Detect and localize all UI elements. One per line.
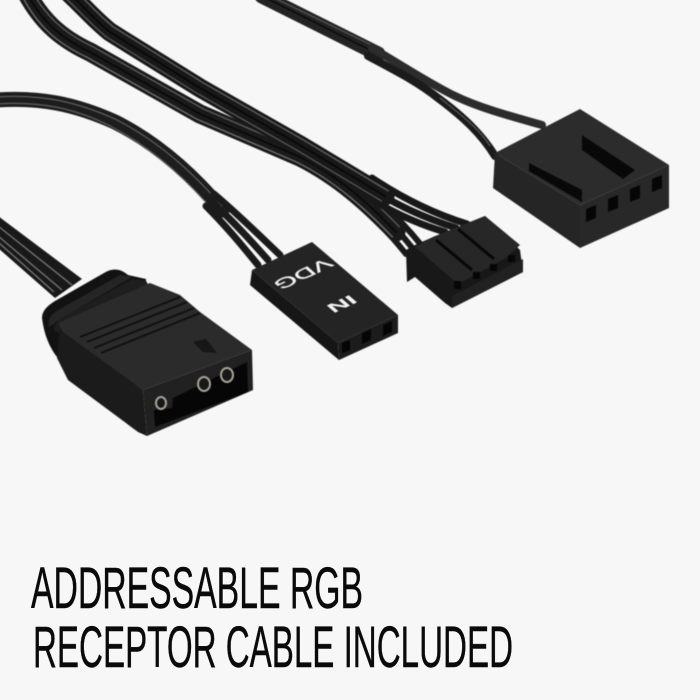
collar rings (42, 269, 146, 357)
front recess (154, 362, 248, 427)
sockets (454, 281, 461, 289)
top face (415, 216, 520, 284)
cable: left arc to VDG connector (0, 96, 280, 265)
front lip (452, 259, 523, 308)
cable: upper long bundle to small fan connector (66, 0, 467, 232)
cable: bundle to RGB connector (0, 216, 82, 298)
connector: small 4-pin fan (406, 216, 523, 308)
side face (250, 270, 339, 360)
top slots (582, 135, 635, 179)
connector: large 4-pin fan (493, 109, 669, 248)
ridges (80, 297, 200, 353)
connector: RGB receptor (42, 269, 253, 436)
title line 1: ADDRESSABLE RGB (31, 556, 363, 621)
top face (252, 242, 398, 343)
front face (143, 350, 253, 436)
pins (156, 368, 233, 409)
arrow mark (193, 339, 217, 353)
label: VDG: VDG (268, 255, 336, 292)
side face (57, 326, 147, 436)
body (406, 216, 523, 308)
sockets (342, 340, 350, 353)
connector: VDG 3-pin header (250, 242, 398, 360)
cable: lower long bundle to small fan connector (20, 0, 422, 254)
top slots (436, 229, 494, 270)
top face (58, 283, 252, 390)
sockets (586, 205, 596, 222)
product photo group (0, 0, 669, 436)
title (31, 556, 513, 680)
label: IN: IN (323, 292, 361, 315)
top face (495, 109, 669, 205)
front face (580, 165, 669, 248)
side face (493, 153, 580, 248)
cable: top right bundle to large fan connector (262, 0, 542, 156)
front face (338, 315, 398, 360)
